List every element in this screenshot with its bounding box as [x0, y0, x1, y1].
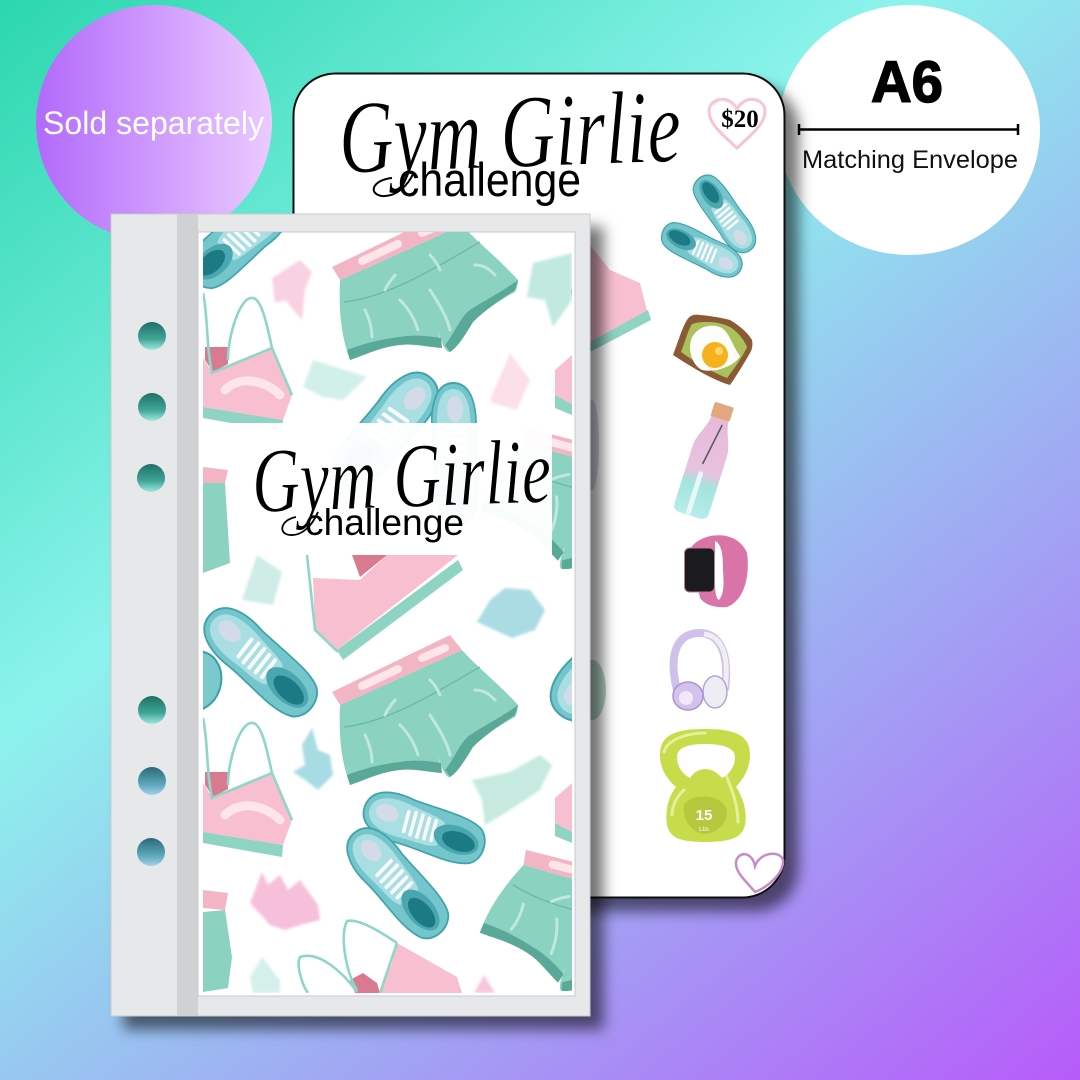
price heart: $20 — [721, 106, 759, 133]
punched holes — [137, 322, 166, 866]
icon: water bottle — [672, 399, 742, 521]
pattern peeking from behind front sheet — [578, 245, 651, 720]
icon: kettlebell: Lbs — [699, 827, 709, 833]
badge: sold separately — [36, 5, 272, 241]
icon: kettlebell — [660, 729, 750, 842]
binding strip — [177, 214, 198, 1016]
price heart — [709, 99, 765, 148]
icon: corner heart — [736, 854, 783, 892]
card title: Gym Girlie — [337, 69, 683, 196]
card title: challenge — [398, 153, 581, 206]
icon: kettlebell: 15 — [696, 807, 712, 824]
translucent title band — [240, 423, 552, 555]
sneakers — [203, 650, 222, 710]
sheet title — [250, 420, 553, 543]
dimension line — [799, 124, 1018, 135]
fitness pattern insert — [198, 232, 576, 996]
envelope caption: Matching Envelope — [802, 146, 1018, 174]
shorts — [332, 232, 518, 360]
icon: sneakers — [656, 169, 763, 284]
sports tops — [203, 718, 294, 857]
size label A6: A6 — [871, 50, 943, 115]
icon: avocado toast with egg — [673, 315, 752, 385]
badge text: Sold separately — [43, 105, 264, 141]
sheet title: challenge — [305, 502, 464, 543]
back card: A6 envelope sheet — [294, 69, 784, 897]
icon: headphones — [673, 633, 727, 710]
front sheet: planner dashboard — [110, 214, 614, 1040]
card title — [337, 69, 683, 206]
icon: smart watch — [684, 535, 748, 607]
sheet title: Gym Girlie — [250, 420, 553, 532]
badge: A6 matching envelope — [778, 5, 1040, 255]
